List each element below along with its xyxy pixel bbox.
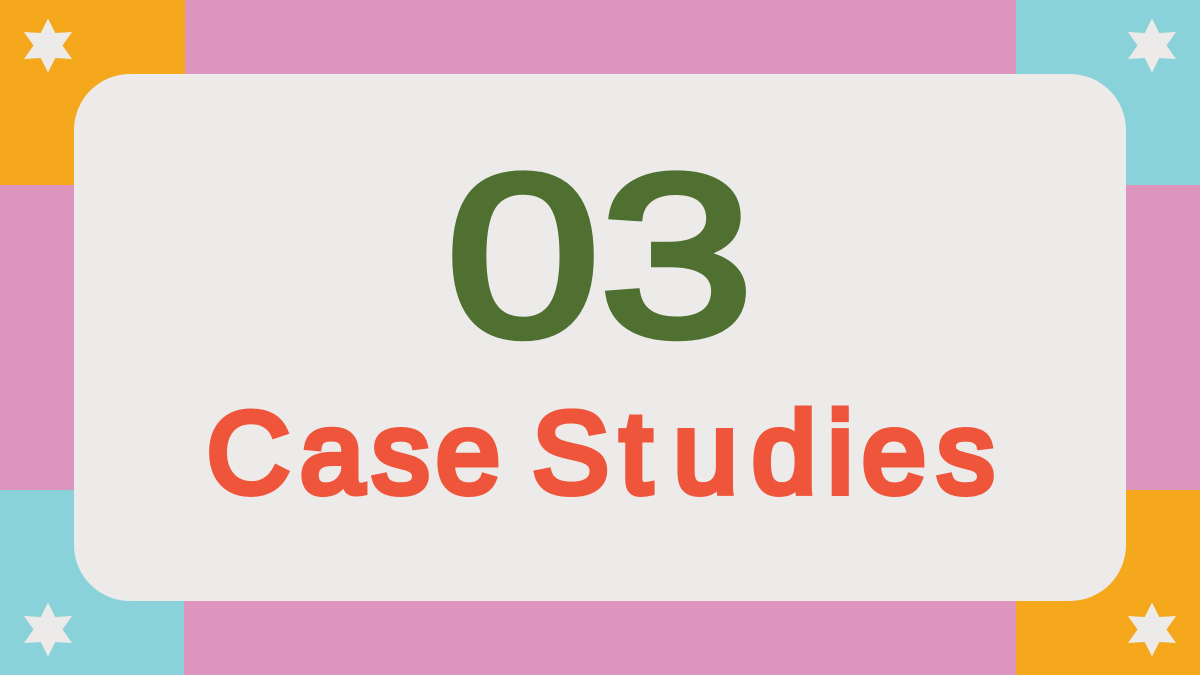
corner block: bottom right orange (1016, 490, 1200, 675)
section title: Case Studies (207, 390, 994, 518)
corner block: top right teal (1016, 0, 1200, 185)
icon: six-pointed star, bottom right (1128, 602, 1176, 656)
icon: six-pointed star, bottom left (24, 602, 72, 656)
icon: six-pointed star, top left (24, 18, 72, 72)
icon: six-pointed star, top right (1128, 18, 1176, 72)
section number: 03 (446, 127, 753, 384)
corner block: top left orange (0, 0, 185, 185)
central rounded panel (74, 74, 1126, 601)
corner block: bottom left teal (0, 490, 184, 675)
